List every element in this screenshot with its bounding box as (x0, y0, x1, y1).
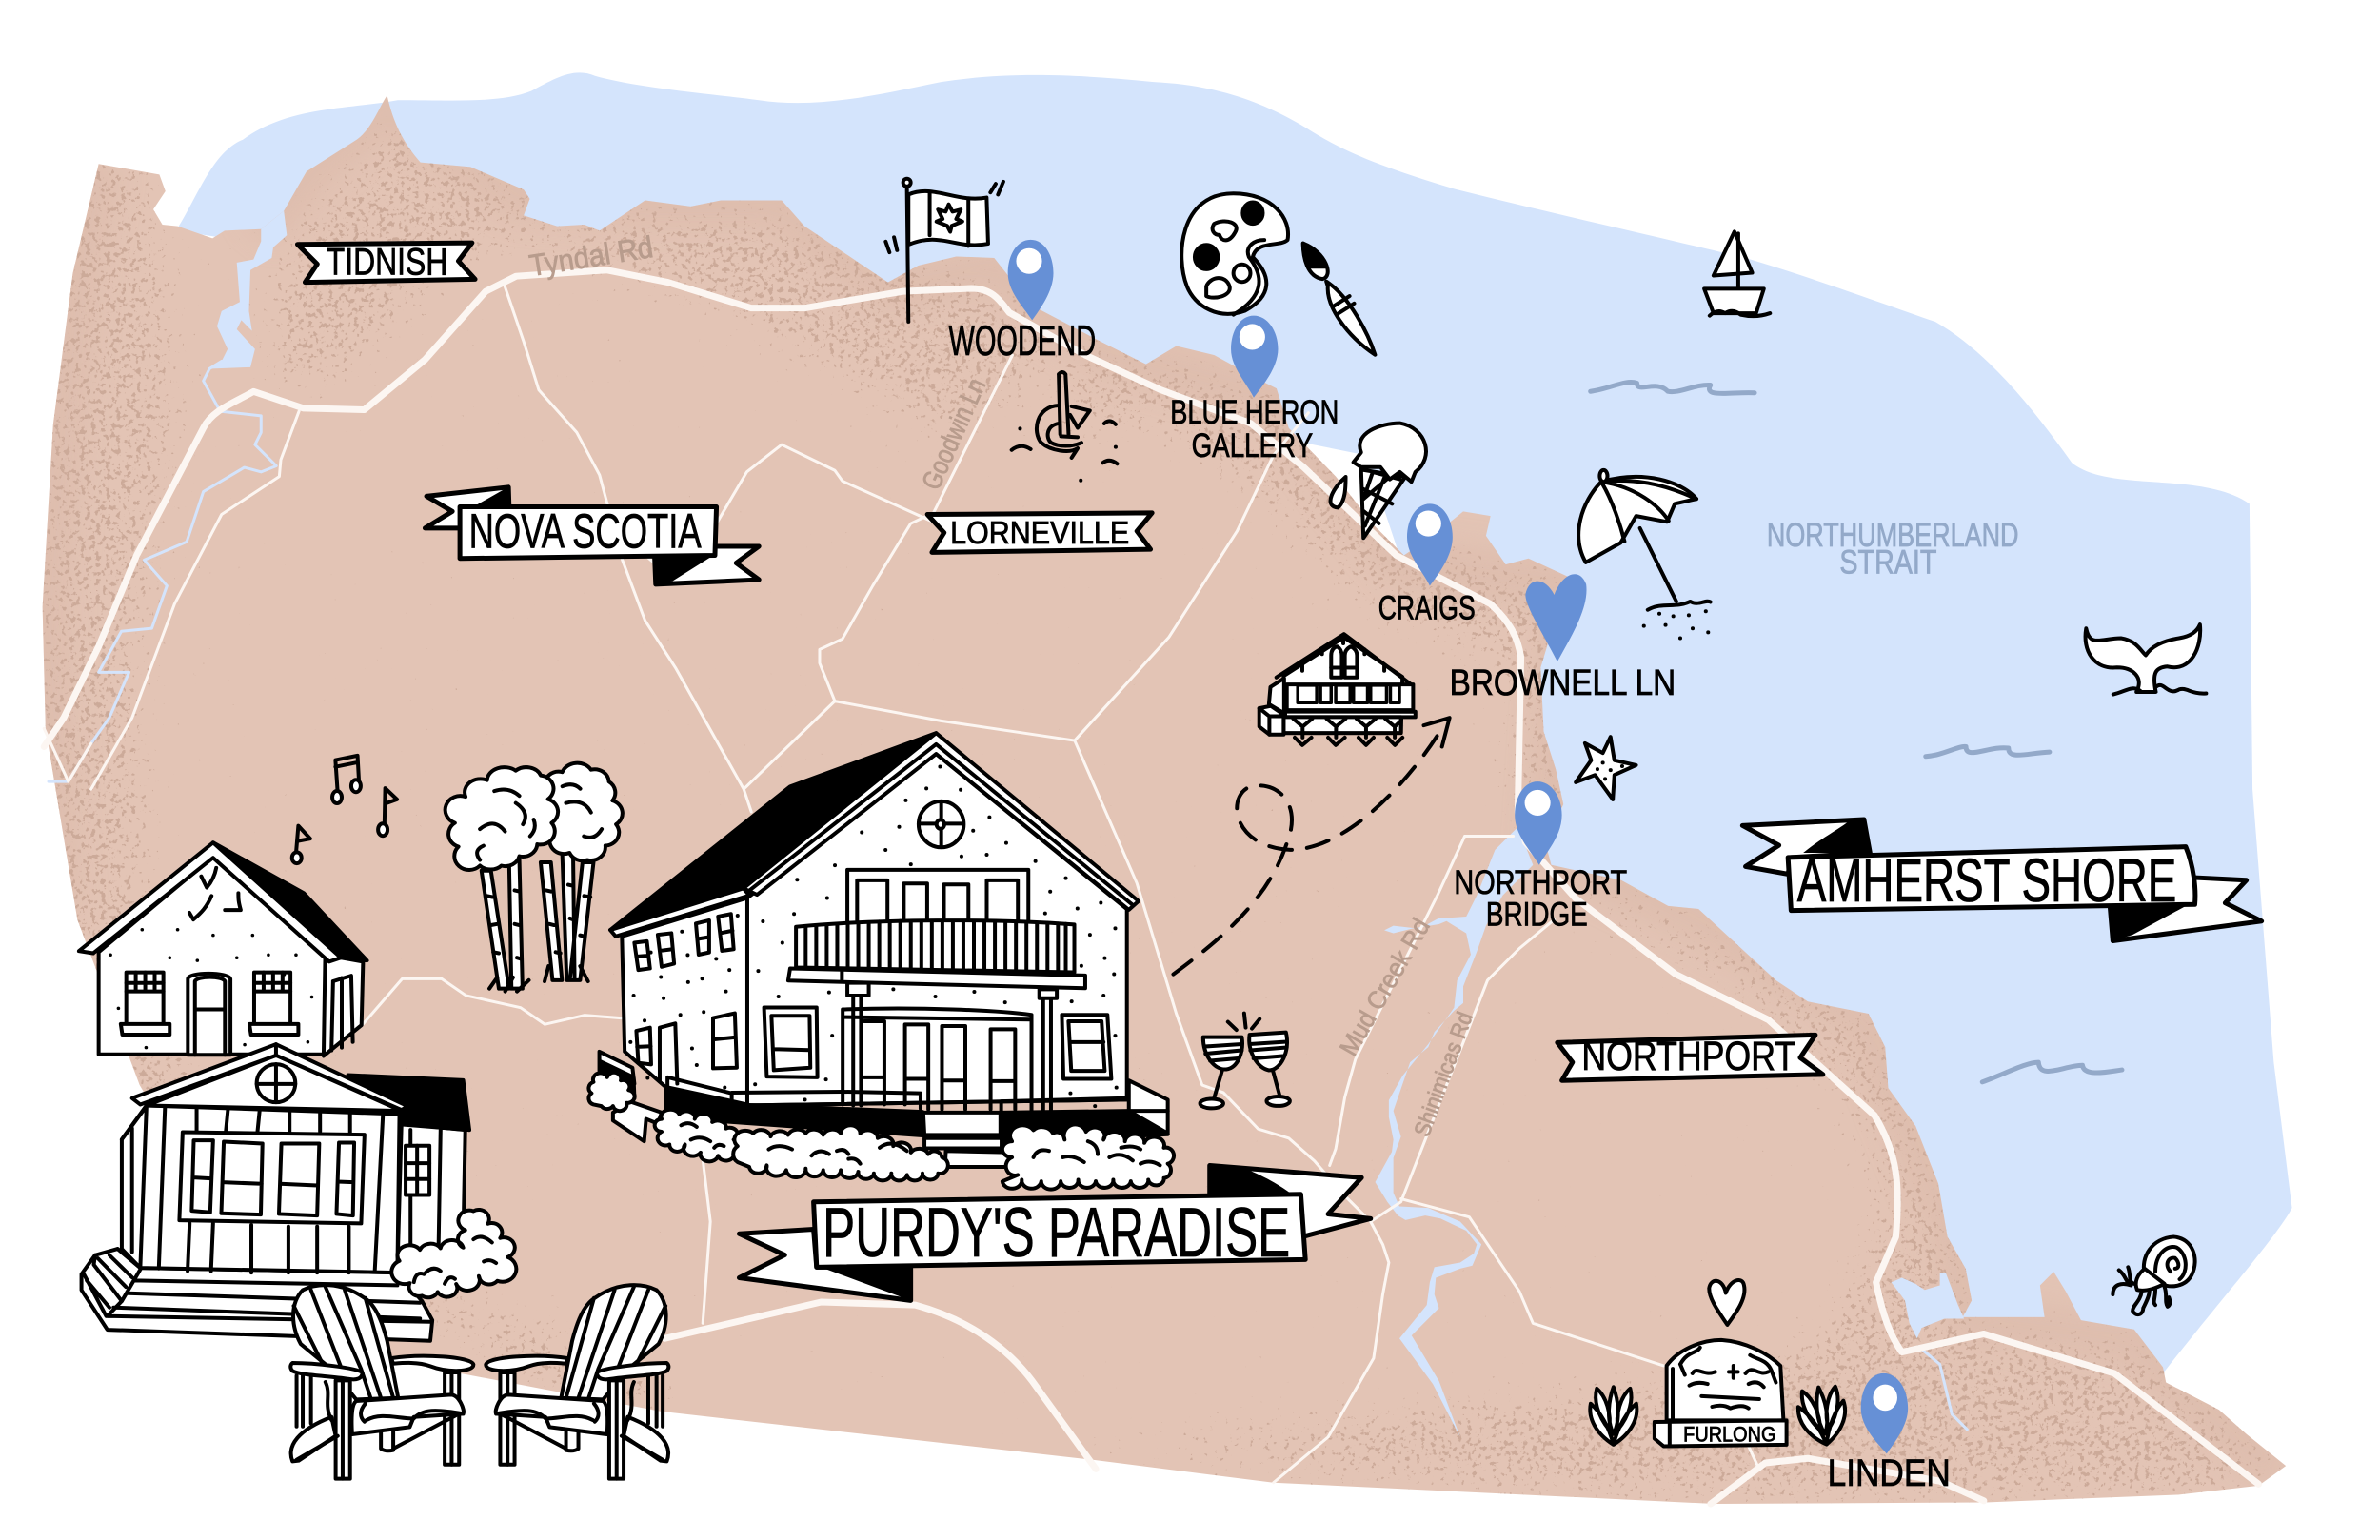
label: Blue Heron Gallery (1170, 394, 1339, 464)
label: Brownell Ln: BROWNELL LN (1450, 662, 1676, 703)
banner: Amherst Shore: AMHERST SHORE (1797, 846, 2176, 915)
label: Northumberland Strait: NORTHUMBERLAND (1767, 517, 2019, 554)
arrow: dashed route to Brownell Ln (1173, 718, 1450, 975)
pin: Northport Bridge (1515, 781, 1562, 865)
illustration: small house (79, 842, 367, 1056)
banner: Nova Scotia (425, 487, 759, 584)
label: Blue Heron Gallery: BLUE HERON (1170, 394, 1339, 431)
banner: Tidnish: TIDNISH (327, 242, 447, 284)
icon: paint brush (1303, 244, 1375, 355)
pin: Blue Heron Gallery (1231, 316, 1278, 398)
icon: beach umbrella (1578, 470, 1711, 638)
icon: music notes (292, 756, 397, 863)
label: Linden: LINDEN (1828, 1452, 1951, 1494)
icon: starfish (1576, 737, 1636, 800)
icon: whale tail (2086, 624, 2206, 695)
banner: Purdy's Paradise: PURDY'S PARADISE (823, 1194, 1290, 1272)
label: Blue Heron Gallery: GALLERY (1192, 427, 1313, 464)
creek and inlet below Northport Bridge (1376, 827, 1533, 1437)
label: Craigs: CRAIGS (1378, 590, 1476, 627)
banner: Purdy's Paradise (739, 1165, 1371, 1300)
label: Woodend: WOODEND (948, 318, 1096, 365)
wave mark lower (1982, 1062, 2122, 1082)
label: Northport Bridge (1454, 864, 1627, 934)
banner: Lorneville: LORNEVILLE (950, 516, 1129, 551)
illustration: Adirondack chair left (290, 1285, 473, 1479)
banner: Nova Scotia: NOVA SCOTIA (469, 504, 702, 559)
pin: Woodend (1008, 240, 1054, 320)
road label: Tyndal Rd: Tyndal Rd (526, 229, 655, 283)
icon: Furlong headstone: FURLONG (1683, 1423, 1775, 1447)
rivers (49, 361, 1967, 1430)
icon: hermit crab (2112, 1236, 2195, 1314)
icon: left plant (1590, 1387, 1636, 1445)
label: Northport Bridge: NORTHPORT (1454, 864, 1627, 901)
label: Northumberland Strait: STRAIT (1839, 544, 1936, 582)
label: Northport Bridge: BRIDGE (1486, 897, 1588, 934)
icon: paint palette (1181, 193, 1288, 315)
road label: Shinimicas Rd: Shinimicas Rd (1410, 1009, 1478, 1140)
illustration: Purdy's Paradise main house (588, 733, 1174, 1190)
banner: Northport: NORTHPORT (1581, 1034, 1795, 1079)
icon: Furlong headstone (1655, 1340, 1787, 1447)
icon: sailboat (1704, 231, 1770, 316)
label: Northumberland Strait (1767, 517, 2019, 582)
icon: trees (446, 763, 623, 992)
illustration: cabin on stilts (1259, 634, 1416, 745)
pin: Linden (1861, 1373, 1908, 1453)
illustration: Adirondack chair right (486, 1285, 668, 1479)
icon: golf hole marker (1012, 372, 1117, 481)
icon: heart above headstone (1709, 1280, 1744, 1325)
water: Northumberland Strait (176, 72, 2292, 1373)
roads (44, 270, 2258, 1504)
small bay near Linden (1892, 1273, 1964, 1338)
water inlet near Tidnish (209, 211, 287, 368)
icon: Canadian flag (885, 179, 1003, 322)
wave marks (1591, 383, 2050, 757)
heart: Brownell Ln location (1525, 574, 1587, 661)
illustration: cottage (82, 1044, 469, 1341)
icon: ice cream cone (1331, 424, 1426, 538)
banner: Amherst Shore (1742, 819, 2262, 941)
road label: Goodwin Ln: Goodwin Ln (916, 374, 992, 494)
pin: Craigs (1407, 503, 1453, 585)
road label: Mud Creek Rd: Mud Creek Rd (1334, 913, 1436, 1060)
icon: clinking wine glasses (1200, 1014, 1290, 1108)
icon: right plant (1795, 1384, 1850, 1448)
icon: cottage bush (391, 1210, 516, 1297)
